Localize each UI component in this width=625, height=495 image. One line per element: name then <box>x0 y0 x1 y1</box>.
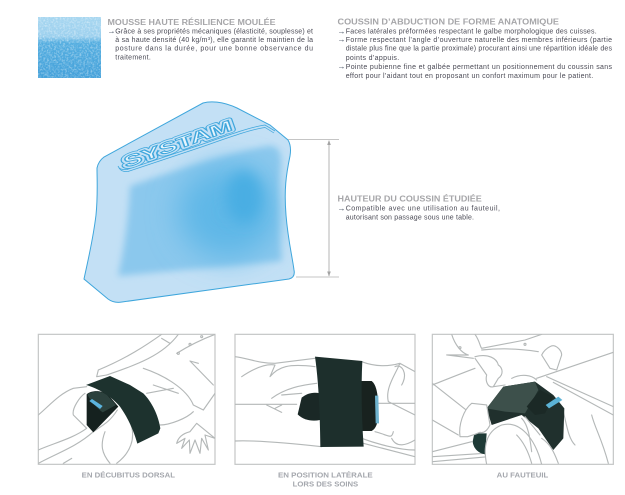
text block: cushion height <box>338 193 500 221</box>
strap <box>86 376 160 444</box>
black cushion right <box>362 381 378 431</box>
caption: supine: EN DÉCUBITUS DORSAL <box>82 471 175 480</box>
text block: molded high-resilience foam <box>108 17 313 62</box>
cushion body <box>84 102 294 302</box>
body text: foam: à sa haute densité (40 kg/m³), elle garantit le maintien de la <box>115 37 313 44</box>
body text: anatomical shape: → <box>338 62 346 71</box>
cushion lighter top <box>487 382 538 413</box>
body text: height <box>338 204 500 221</box>
body text: anatomical shape: → <box>338 35 346 44</box>
strap end <box>473 433 487 454</box>
panel: lateral position <box>235 334 415 464</box>
panel: armchair position <box>432 334 613 464</box>
panel: supine position <box>38 334 215 464</box>
black cushion <box>487 382 564 450</box>
heading: foam: MOUSSE HAUTE RÉSILIENCE MOULÉE <box>108 17 276 27</box>
foam texture swatch <box>38 17 101 78</box>
body text: anatomical shape: distale plus fine que la partie proximale) procurant ainsi une répartition idéale des <box>346 46 612 52</box>
black cushion left <box>298 393 320 421</box>
body text: foam: Grâce à ses propriétés mécaniques (élasticité, souplesse) et <box>115 28 313 35</box>
heading: height: HAUTEUR DU COUSSIN ÉTUDIÉE <box>338 193 482 203</box>
body text: anatomical shape: Faces latérales préformées respectant le galbe morphologique des cuisses. <box>346 29 597 36</box>
knee and hand <box>485 424 542 464</box>
cushion blue side face <box>118 146 282 276</box>
caption: lateral <box>278 471 373 488</box>
body text: foam <box>108 27 313 62</box>
cushion illustration <box>84 102 294 302</box>
body text: anatomical shape: Forme respectant l’angle d’ouverture naturelle des membres inférieurs (partie <box>346 37 612 44</box>
logo: SYSTAM <box>122 117 235 172</box>
caption: lateral: LORS DES SOINS <box>293 480 358 488</box>
blue label <box>89 399 103 409</box>
logo: SYSTAM: SYSTAM <box>122 117 235 172</box>
body text: anatomical shape: Pointe pubienne fine et galbée permettant un positionnement du coussin sans <box>346 64 612 71</box>
body text: anatomical shape: effort pour l’aidant tout en proposant un confort maximum pour le patient. <box>346 73 593 80</box>
body text: foam: posture dans la durée, pour une bonne observance du <box>115 46 313 53</box>
body text: anatomical shape <box>338 27 612 80</box>
body text: anatomical shape: → <box>338 27 346 36</box>
height dimension arrow <box>288 140 339 277</box>
caption: lateral: EN POSITION LATÉRALE <box>278 471 373 480</box>
cushion seam lines <box>118 125 275 170</box>
body text: anatomical shape: points d’appuis. <box>346 55 399 62</box>
body text: height: → <box>338 204 346 213</box>
heading: anatomical shape: COUSSIN D’ABDUCTION DE FORME ANATOMIQUE <box>338 16 559 26</box>
strap <box>315 357 364 447</box>
logo: SYSTAM: SYSTAM <box>122 117 235 172</box>
body text: foam: traitement. <box>115 55 151 62</box>
caption: armchair: AU FAUTEUIL <box>497 471 549 480</box>
blue label <box>546 397 562 408</box>
body text: height: Compatible avec une utilisation au fauteuil, <box>346 206 500 213</box>
logo: SYSTAM: SYSTAM <box>122 117 235 172</box>
body text: foam: → <box>108 27 116 36</box>
blue label <box>375 396 379 423</box>
body text: height: autorisant son passage sous une table. <box>346 214 474 221</box>
cushion outline <box>84 102 294 302</box>
black cushion <box>87 391 118 432</box>
patient line drawing <box>97 334 215 425</box>
patient line drawing <box>235 357 415 457</box>
table and patient line drawing <box>432 334 613 463</box>
text block: anatomical abduction cushion <box>338 16 612 80</box>
